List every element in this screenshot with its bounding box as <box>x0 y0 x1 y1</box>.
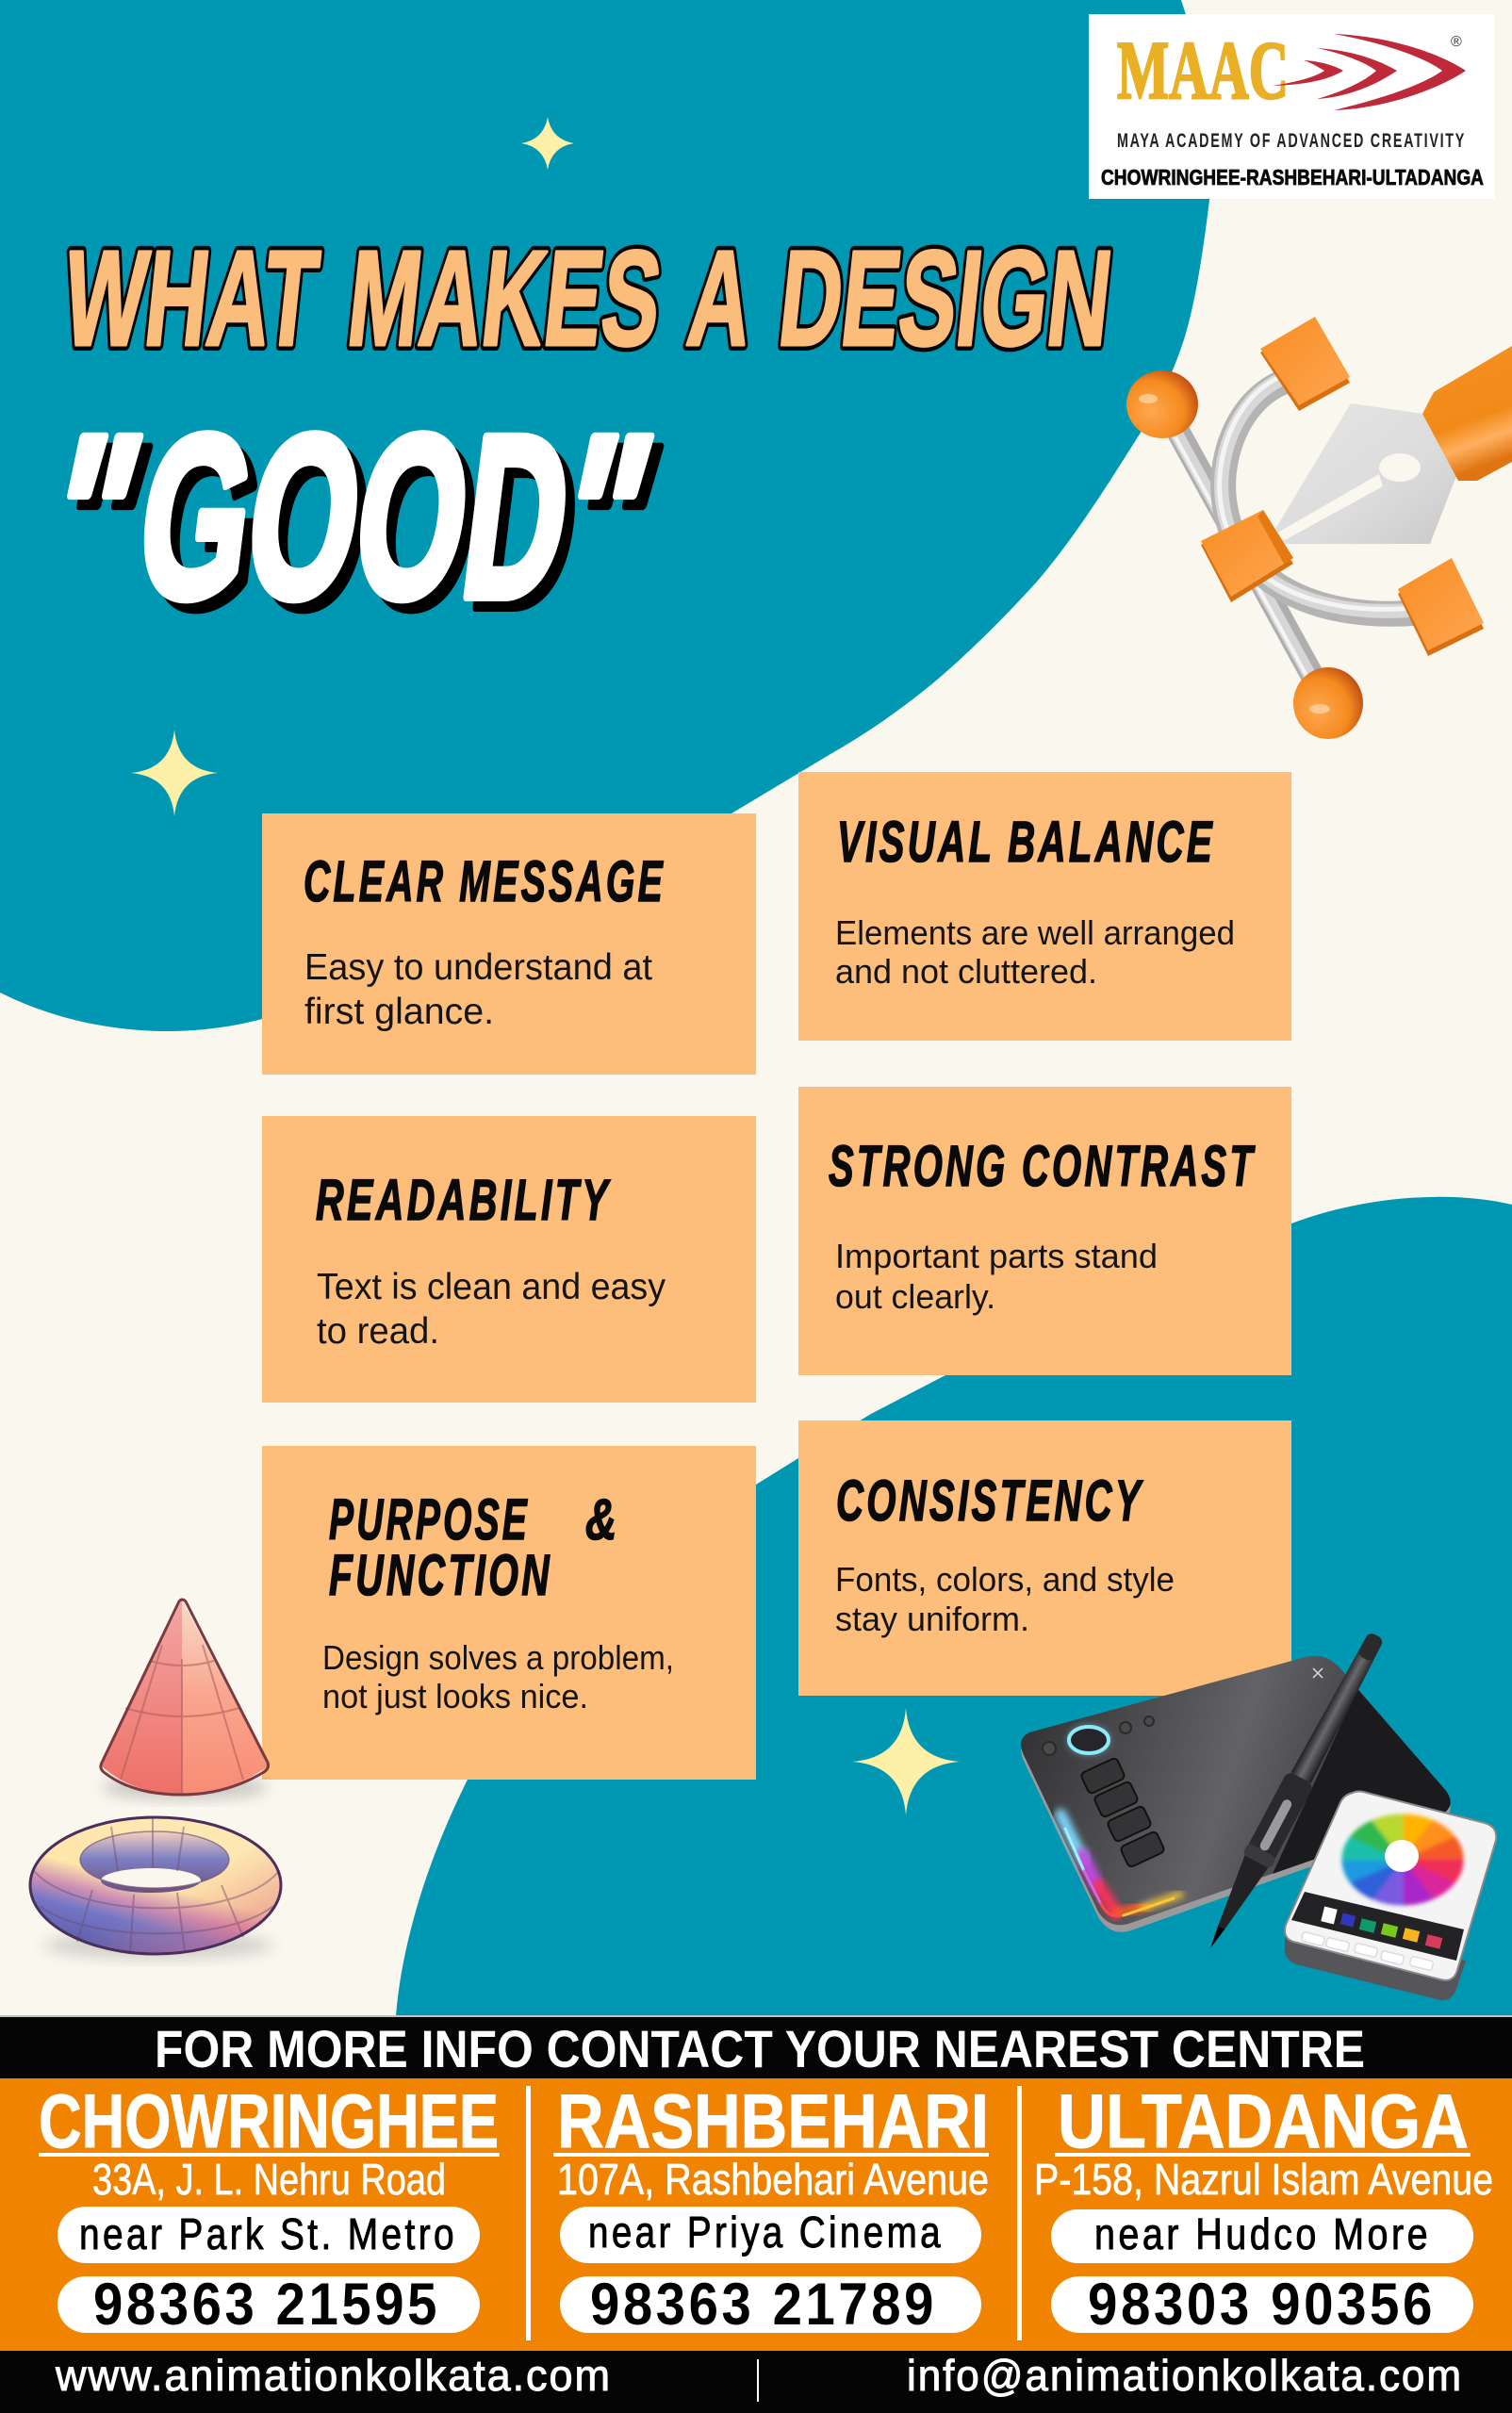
description: Important parts stand <box>835 1237 1158 1275</box>
description: stay uniform. <box>835 1600 1029 1638</box>
description <box>835 913 1235 991</box>
pen tool arc <box>1220 377 1419 614</box>
description <box>304 947 652 1032</box>
teal blob top <box>0 0 1212 1031</box>
heading: PURPOSE <box>329 1487 530 1551</box>
pen tool nib <box>1274 403 1456 544</box>
heading: CLEAR MESSAGE <box>304 849 666 913</box>
contact header bar <box>0 2015 1512 2078</box>
description: Text is clean and easy <box>317 1267 666 1307</box>
footer bar <box>0 2351 1512 2413</box>
icon: cone <box>101 1600 269 1799</box>
heading: & <box>585 1487 620 1551</box>
card: clear message <box>262 813 756 1075</box>
title: good <box>20 386 683 657</box>
centre: chowringhee: near Park St. Metro <box>79 2209 457 2258</box>
email: info@animationkolkata.com <box>907 2351 1463 2400</box>
centre: rashbehari: 98363 21789 <box>590 2272 937 2338</box>
centre: chowringhee <box>39 2079 500 2338</box>
description: Easy to understand at <box>304 947 652 988</box>
centre: ultadanga: near Hudco More <box>1094 2209 1431 2258</box>
title: good: " <box>540 397 683 656</box>
tablet rim <box>1021 1662 1451 1932</box>
heading: VISUAL BALANCE <box>837 810 1215 874</box>
website: www.animationkolkata.com <box>55 2351 612 2400</box>
logo swoosh <box>1273 34 1466 110</box>
centres panel <box>0 2078 1512 2351</box>
description: to read. <box>317 1311 439 1352</box>
description: out clearly. <box>835 1277 995 1316</box>
tablet small buttons <box>1043 1716 1154 1755</box>
colour wheel <box>1336 1809 1470 1911</box>
description: not just looks nice. <box>322 1677 588 1715</box>
icon: torus <box>30 1817 281 1959</box>
title: good: GOOD <box>127 387 583 647</box>
stylus <box>1196 1628 1391 1956</box>
heading: READABILITY <box>316 1168 611 1232</box>
pen tool barrel <box>1422 346 1512 481</box>
centre: rashbehari: 107A, Rashbehari Avenue <box>557 2155 989 2204</box>
divider <box>526 2086 531 2340</box>
pen tool sphere bottom <box>1293 667 1363 739</box>
description: Fonts, colors, and style <box>835 1560 1175 1599</box>
description: and not cluttered. <box>835 952 1097 991</box>
title: good: GOOD <box>137 398 592 657</box>
tablet express keys <box>1080 1757 1165 1868</box>
pen tool centre anchor <box>1201 510 1293 602</box>
divider <box>1017 2086 1022 2340</box>
logo wordmark: MAAC <box>1117 25 1289 117</box>
centre: chowringhee: 33A, J. L. Nehru Road <box>92 2155 446 2204</box>
card: readability <box>262 1116 756 1403</box>
pen tool right handle <box>1398 558 1484 656</box>
description <box>317 1267 666 1352</box>
logo <box>1089 14 1495 199</box>
tablet dark side <box>1273 1689 1451 1874</box>
description <box>835 1560 1175 1638</box>
centre: ultadanga: 98303 90356 <box>1088 2272 1436 2338</box>
centre: rashbehari <box>553 2079 989 2338</box>
centre: rashbehari: RASHBEHARI <box>557 2079 989 2164</box>
tablet rainbow glow <box>1060 1814 1180 1916</box>
colour palette device <box>1285 1791 1496 2000</box>
card: strong contrast <box>798 1087 1291 1375</box>
logo registered mark: ® <box>1451 34 1462 50</box>
tablet surface <box>1021 1656 1451 1925</box>
palette keys <box>1301 1931 1434 1971</box>
palette dark strip <box>1291 1892 1464 1961</box>
card: visual balance <box>798 772 1291 1041</box>
title: good: " <box>29 397 173 656</box>
tablet cross mark <box>1313 1668 1323 1678</box>
card: purpose and function <box>262 1446 756 1780</box>
icon: pen tool <box>1126 317 1512 739</box>
sparkle: top <box>521 117 574 170</box>
pen tool top handle <box>1260 317 1350 411</box>
centre: ultadanga <box>1034 2079 1493 2338</box>
description <box>322 1638 674 1715</box>
sparkle: left <box>131 730 218 816</box>
description: Elements are well arranged <box>835 913 1235 952</box>
contact heading: FOR MORE INFO CONTACT YOUR NEAREST CENTRE <box>155 2019 1365 2078</box>
centre: chowringhee: 98363 21595 <box>93 2272 440 2338</box>
palette swatches <box>1321 1907 1442 1949</box>
teal blob bottom <box>396 1197 1512 2017</box>
card: consistency <box>798 1420 1291 1696</box>
heading: STRONG CONTRAST <box>829 1134 1256 1198</box>
heading <box>329 1487 620 1607</box>
tablet ring dial <box>1068 1726 1109 1754</box>
sparkle: bottom <box>852 1708 960 1815</box>
pen tool sphere top <box>1126 370 1198 438</box>
icon: drawing tablet <box>1021 1628 1496 2000</box>
pen tool handle bar <box>1165 415 1324 699</box>
description <box>835 1237 1158 1316</box>
description: first glance. <box>304 992 494 1032</box>
title: good: " <box>20 386 163 646</box>
title: good: " <box>531 386 674 646</box>
heading: FUNCTION <box>329 1543 552 1607</box>
description: Design solves a problem, <box>322 1638 674 1677</box>
centre: chowringhee: CHOWRINGHEE <box>39 2079 499 2164</box>
centre: rashbehari: near Priya Cinema <box>588 2208 944 2257</box>
heading: CONSISTENCY <box>836 1469 1143 1533</box>
